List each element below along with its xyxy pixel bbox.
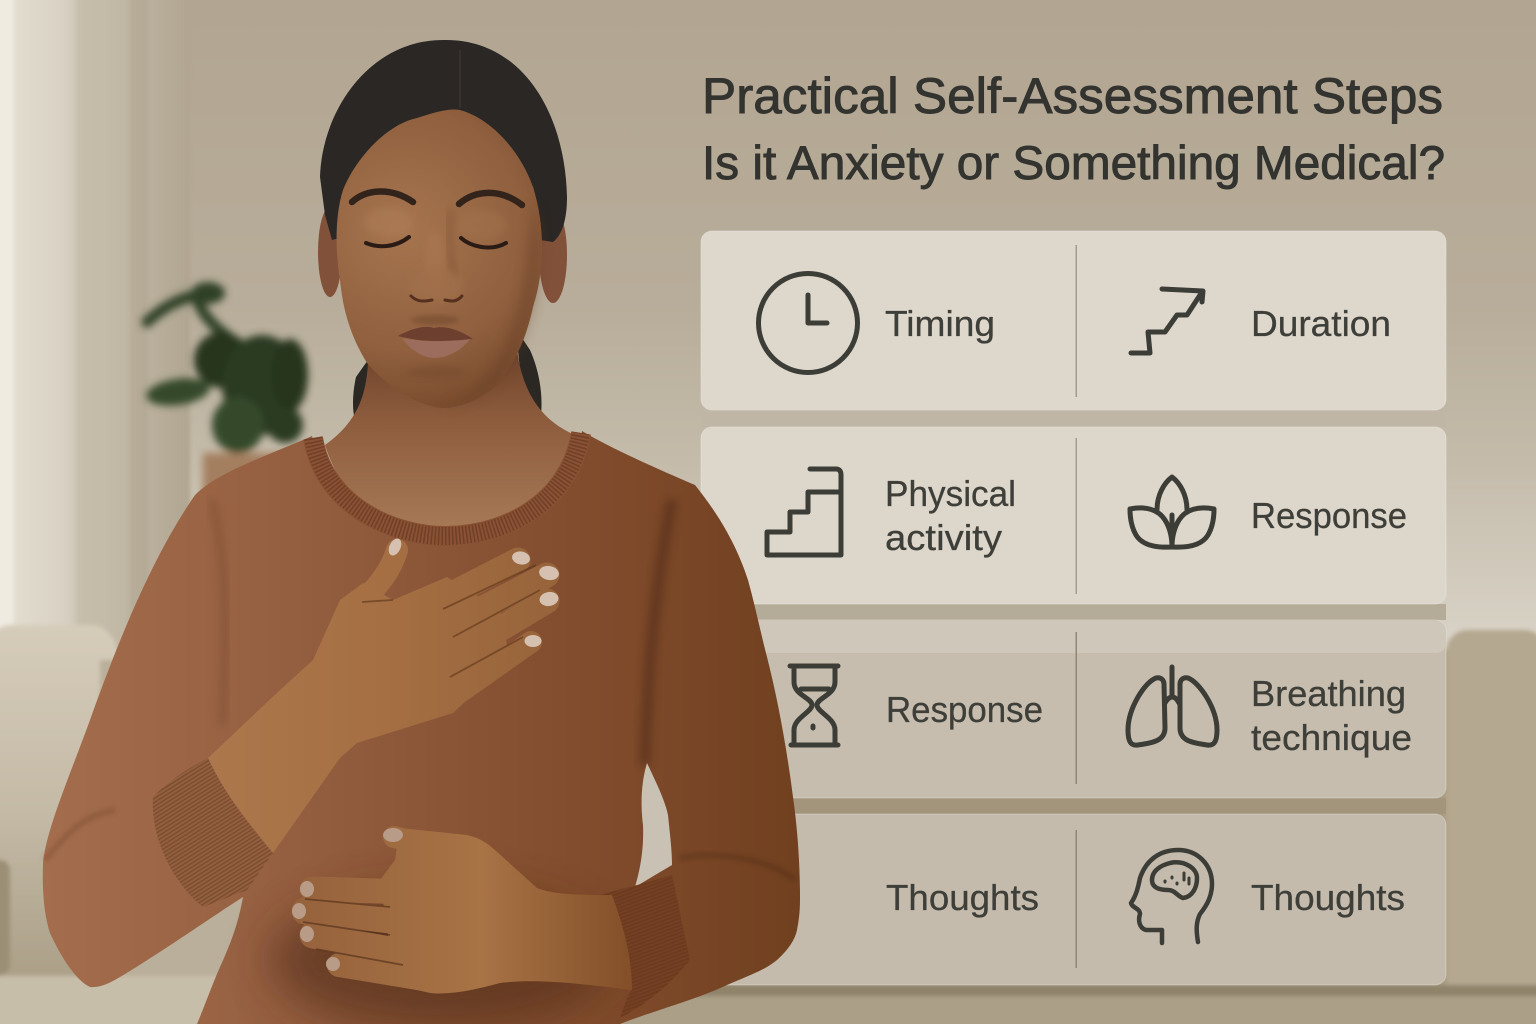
upper hand fingernails xyxy=(386,537,560,647)
lower hand finger gaps xyxy=(303,899,403,965)
background: sofa xyxy=(0,625,1536,1024)
background: potted plant xyxy=(145,282,308,503)
lower hand fingernails xyxy=(292,828,403,971)
lower hand thumb and fingers xyxy=(305,837,470,980)
face xyxy=(337,109,542,408)
background: living room wall xyxy=(114,375,1536,654)
label: physical activity: activity xyxy=(885,517,1002,558)
ponytail behind neck xyxy=(353,340,542,415)
hair xyxy=(320,40,567,242)
eyes closed xyxy=(366,237,506,247)
gap between right arm and torso xyxy=(635,763,672,887)
upper hand thumb and fingers xyxy=(352,550,547,692)
gaps between panels xyxy=(754,604,1446,814)
icon: lotus xyxy=(1130,477,1214,547)
sweater shading xyxy=(45,500,795,1024)
ears xyxy=(318,207,567,303)
sweater collar xyxy=(313,433,581,536)
label: breathing technique xyxy=(1251,673,1412,758)
icon: hourglass xyxy=(790,666,838,745)
right cuff xyxy=(600,875,690,1018)
label: response: Response xyxy=(1251,495,1407,536)
icon: head with brain xyxy=(1131,850,1212,943)
sweater torso and arms xyxy=(43,431,800,1024)
label: physical activity: Physical xyxy=(885,473,1016,514)
label: thoughts: Thoughts xyxy=(1251,877,1405,918)
forearm and upper hand xyxy=(208,537,560,853)
upper hand finger gaps xyxy=(362,565,540,677)
left cuff xyxy=(153,758,273,907)
neck xyxy=(325,354,571,526)
lower hand xyxy=(292,828,632,993)
panel: physical activity and response xyxy=(701,427,1446,604)
hair part xyxy=(459,50,461,108)
eyebrows xyxy=(352,191,522,205)
label: breathing technique: Breathing xyxy=(1251,673,1406,714)
label: breathing technique: technique xyxy=(1251,717,1412,758)
lips xyxy=(398,327,473,358)
face shading xyxy=(364,200,540,408)
label: response: Response xyxy=(886,689,1043,730)
label: physical activity xyxy=(886,480,1014,558)
label: duration: Duration xyxy=(1251,303,1391,344)
title: Is it Anxiety or Something Medical? xyxy=(702,136,1445,189)
panel: thoughts xyxy=(701,814,1446,985)
panel: timing and duration xyxy=(701,231,1446,410)
person xyxy=(43,40,800,1024)
panels: step cards xyxy=(701,231,1446,985)
icon: stairs xyxy=(767,469,841,555)
label: timing: Timing xyxy=(885,303,995,344)
title xyxy=(702,68,1445,189)
nose xyxy=(409,267,463,303)
panel: response and breathing technique xyxy=(701,620,1446,798)
title: Practical Self-Assessment Steps xyxy=(702,68,1443,124)
icon: clock xyxy=(758,274,858,372)
label: thoughts: Thoughts xyxy=(886,877,1039,918)
icon: lungs xyxy=(1128,667,1217,745)
icon: rising steps arrow xyxy=(1131,289,1203,353)
background: window curtain xyxy=(0,0,190,650)
